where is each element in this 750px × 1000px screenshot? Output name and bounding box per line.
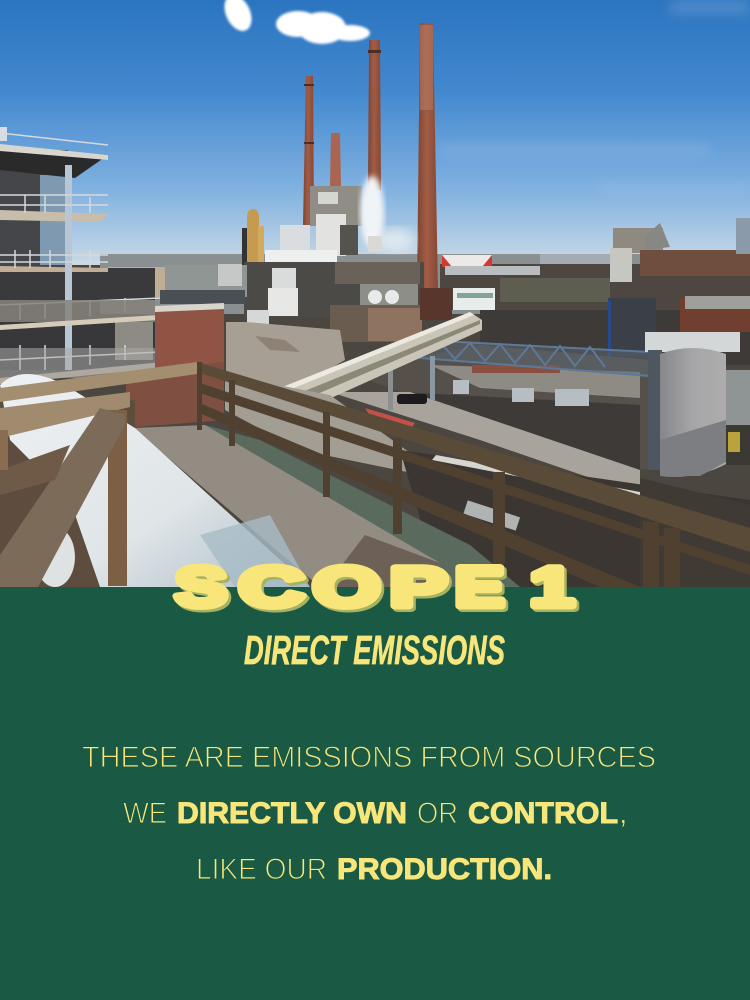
- photo: chemical plant under blue sky: [0, 0, 750, 587]
- heading: Scope 1: [175, 555, 576, 620]
- heading face: S: [175, 555, 227, 618]
- IBC containers: [453, 380, 589, 406]
- right mid dark structures: [480, 310, 750, 365]
- red pallets: [472, 365, 560, 373]
- heading face: O: [313, 555, 380, 618]
- panel: green text background: [0, 587, 750, 1000]
- text block: description: [82, 741, 656, 886]
- line 2: [123, 797, 627, 830]
- heading shadow: C: [242, 558, 306, 620]
- line 3: PRODUCTION.: [337, 853, 552, 886]
- line 2: WE: [123, 797, 167, 830]
- pipe bridge: [284, 312, 482, 397]
- big white pipe: [0, 374, 310, 587]
- heading shadow: O: [316, 558, 382, 620]
- line 2: CONTROL: [468, 797, 618, 830]
- stack: tall right: [417, 23, 438, 290]
- parked car: [397, 394, 427, 404]
- heading face: [175, 555, 574, 618]
- heading shadow: E: [458, 558, 506, 620]
- far buildings right: [440, 218, 750, 310]
- smoke plume: [360, 176, 415, 252]
- background mid buildings / beige: [108, 267, 168, 297]
- yard: [345, 345, 650, 470]
- line 3: LIKE OUR: [196, 853, 327, 886]
- stack: left: [303, 76, 314, 225]
- concrete under pipes to left of rail: [225, 381, 408, 472]
- stack: short: [330, 133, 341, 186]
- sky: [0, 0, 750, 265]
- subheading: Direct Emissions: DIRECT EMISSIONS: [244, 627, 505, 673]
- mesh under railing: [205, 425, 520, 587]
- plant ground: [226, 322, 345, 392]
- power plant block: [242, 186, 495, 342]
- line 3: [196, 853, 552, 886]
- gray storage tank: [645, 332, 750, 477]
- heading shadow: P: [392, 558, 450, 620]
- wooden left rail: [0, 362, 197, 587]
- dark lower right area: [400, 450, 750, 587]
- heading shadow: S: [178, 558, 230, 620]
- line 2: DIRECTLY OWN: [177, 797, 407, 830]
- brick building: [126, 303, 224, 428]
- blue truss bridge: [420, 340, 650, 376]
- distant horizon: [100, 254, 640, 314]
- stack: centre: [368, 40, 381, 190]
- lower-left shadow: [0, 400, 135, 587]
- line 2: OR: [417, 797, 458, 830]
- line 2: ,: [619, 797, 627, 830]
- heading shadow: 1: [532, 558, 576, 620]
- line 1: THESE ARE EMISSIONS FROM SOURCES: [82, 741, 656, 774]
- wooden right railing: [197, 362, 750, 587]
- clouds: [219, 0, 370, 44]
- heading face: P: [390, 555, 447, 618]
- roof deck: [133, 425, 440, 587]
- heading shadow: [178, 558, 576, 620]
- heading face: 1: [530, 555, 574, 618]
- photo base: [0, 265, 750, 587]
- left scaffold building: [0, 127, 162, 384]
- heading face: E: [455, 555, 504, 618]
- heading face: C: [239, 555, 304, 618]
